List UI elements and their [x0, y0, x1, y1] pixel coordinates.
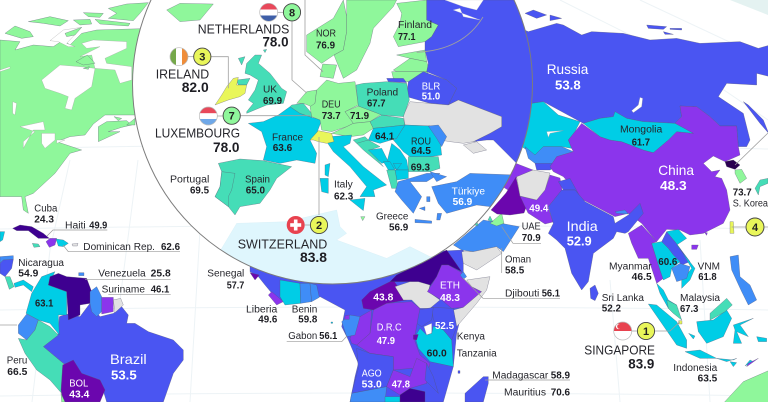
label: Dominican Republic: 62.6: [161, 242, 180, 253]
label: Bolivia: [69, 379, 90, 401]
label: Pakistan value: 49.4: [529, 204, 549, 215]
label: Norway: [316, 29, 336, 51]
label: China: China: [658, 162, 694, 178]
label: UK: UK: [263, 85, 277, 96]
label: Czechia value: 71.9: [350, 111, 369, 122]
label: Bolivia: BOL: [69, 379, 89, 390]
label: Romania: [411, 136, 431, 157]
rank 7: Luxembourg: 7: [229, 111, 235, 123]
label: Germany: DEU: [322, 99, 341, 110]
label: UAE: [522, 221, 541, 244]
label: Liberia: 49.6: [258, 315, 278, 326]
rank 1: Singapore: [584, 322, 655, 371]
label: Nicaragua: [18, 258, 64, 280]
label: Finland: Finland: [398, 20, 432, 31]
map: Europe: [167, 0, 547, 300]
label: Türkiye: 56.9: [453, 197, 473, 208]
label: Angola: AGO: [362, 369, 382, 380]
label: Haiti: [65, 220, 108, 231]
label: Oman: 58.5: [505, 265, 525, 276]
label: Indonesia: [673, 363, 718, 385]
label: Benin: [292, 305, 318, 326]
label: Nicaragua: 54.9: [18, 269, 39, 280]
label: Belarus: 51.0: [422, 91, 441, 102]
label: Sri Lanka: Sri Lanka: [602, 293, 644, 304]
rank 8: Netherlands: [198, 3, 301, 50]
rank 3: Ireland: 3: [199, 52, 205, 64]
label: UAE: UAE: [522, 221, 541, 232]
label: Cuba: [34, 204, 58, 226]
label: Vietnam: [698, 261, 720, 283]
rank 7: Luxembourg: 78.0: [213, 139, 240, 155]
label: Venezuela: Venezuela: [98, 269, 146, 280]
map: Central America and Caribbean: [0, 225, 84, 292]
label: Greece: 56.9: [389, 223, 409, 234]
label: Russia: Russia: [547, 61, 589, 77]
label: Djibouti: Djibouti: [505, 289, 539, 300]
label: Poland: Poland: [367, 88, 398, 99]
label: Bolivia: 43.4: [69, 390, 90, 401]
map: North America: [0, 3, 153, 213]
label: Poland: [367, 88, 398, 110]
rank 2: Switzerland: 2: [316, 220, 322, 232]
label: Haiti: 49.9: [89, 220, 108, 231]
label: Senegal: Senegal: [207, 269, 244, 280]
label: Madagascar: 58.9: [551, 370, 570, 381]
label: Türkiye: Türkiye: [452, 186, 485, 197]
label: Benin: Benin: [292, 305, 317, 316]
label: Oman: [505, 255, 531, 276]
label: Myanmar: [609, 261, 652, 283]
label: Bulgaria value: 69.3: [411, 163, 430, 174]
label: Gabon: Gabon: [288, 331, 317, 342]
label: Russia: 53.8: [555, 77, 581, 92]
rank 7: Luxembourg: LUXEMBOURG: [155, 126, 240, 140]
label: Finland: 77.1: [398, 32, 416, 43]
underlines for labels: [47, 227, 570, 380]
label: Spain: Spain: [245, 174, 270, 185]
label: Peru: [7, 355, 28, 378]
flag: Switzerland: [287, 216, 305, 234]
label: Poland: 67.7: [367, 99, 386, 110]
map: South America: [18, 272, 183, 402]
label: Indonesia: Indonesia: [673, 363, 718, 374]
map: Russia and Central Asia: [500, 10, 768, 242]
label: Angola: 53.0: [362, 379, 382, 390]
label: France: France: [272, 133, 303, 144]
map: Mongolia: [583, 112, 693, 153]
label: Peru: Peru: [7, 355, 27, 366]
label: Venezuela: [98, 269, 171, 280]
label: Belarus: [422, 81, 441, 102]
label: Peru: 66.5: [7, 367, 28, 378]
label: Germany: 73.7: [322, 111, 341, 122]
label: Liberia: [246, 305, 278, 326]
label: UK: [263, 85, 282, 107]
label: Germany: [322, 99, 341, 122]
label: France: 63.6: [273, 143, 293, 154]
label: Brazil: [110, 351, 147, 382]
map: South and Southeast Asia: [548, 190, 768, 402]
label: Spain: 65.0: [246, 185, 265, 196]
label: Venezuela: 25.8: [151, 269, 171, 280]
label: Myanmar: 46.5: [632, 272, 652, 283]
label: Greece: [376, 211, 409, 234]
label: Central African Republic value: 43.8: [373, 293, 394, 304]
flag: Netherlands: [260, 3, 277, 21]
label: Vietnam: 61.8: [698, 272, 717, 283]
label: Hungary value: 64.1: [375, 131, 395, 142]
label: Suriname: Suriname: [102, 284, 145, 295]
label: Mauritius: Mauritius: [504, 388, 546, 399]
flag: Ireland: [170, 48, 188, 65]
label: Oman: Oman: [505, 255, 531, 266]
label: Malaysia: Malaysia: [680, 293, 720, 304]
label: Mongolia: [620, 125, 663, 149]
label: Sri Lanka: 52.2: [602, 304, 621, 315]
label: Tanzania: Tanzania: [457, 349, 497, 360]
label: Gabon: [288, 331, 338, 342]
label: Brazil: 53.5: [111, 367, 137, 382]
label: Ethiopia: 48.3: [440, 293, 460, 304]
label: Italy: 62.3: [334, 191, 354, 202]
label: Sri Lanka: [602, 293, 644, 315]
rank 3: Ireland: 82.0: [182, 79, 209, 95]
map: East Asia: [705, 160, 768, 235]
rank 2: Switzerland: 83.8: [300, 249, 327, 265]
label: Norway: 76.9: [316, 40, 335, 51]
label: Djibouti: [505, 289, 560, 300]
label: Türkiye: [452, 186, 485, 208]
label: Belarus: BLR: [422, 81, 440, 92]
label: Mongolia: 61.7: [632, 138, 650, 149]
label: Senegal: [207, 269, 245, 291]
rank 2: Switzerland: SWITZERLAND: [238, 238, 327, 252]
rank 8: Netherlands: 8: [289, 7, 295, 19]
label: Benin: 59.8: [298, 315, 318, 326]
label: D.R.C.: 47.9: [377, 336, 395, 347]
label: Mongolia: Mongolia: [620, 125, 663, 136]
label: Italy: [334, 179, 354, 202]
label: Cuba: 24.3: [34, 215, 54, 226]
label: Myanmar: Myanmar: [609, 261, 652, 272]
label: Angola: [362, 369, 382, 390]
label: Gabon: 56.1: [319, 331, 338, 342]
label: Portugal: Portugal: [170, 174, 209, 185]
label: India: India: [567, 218, 598, 234]
label: Liberia: Liberia: [246, 305, 278, 316]
label: Cuba: Cuba: [34, 204, 58, 215]
label: Romania: 64.5: [411, 146, 431, 157]
label: Greece: Greece: [376, 211, 409, 222]
label: Madagascar: Madagascar: [492, 370, 549, 381]
label: India: [567, 218, 598, 249]
label: Vietnam: VNM: [698, 261, 720, 272]
label: Finland: [398, 20, 432, 43]
label: Nicaragua: Nicaragua: [18, 258, 64, 269]
label: Ethiopia: [440, 280, 460, 304]
label: Suriname: [102, 284, 170, 295]
flag: Luxembourg: [200, 107, 216, 125]
rank 3: Ireland: IRELAND: [156, 68, 209, 82]
label: Zambia value: 47.8: [392, 379, 410, 390]
rank 7: Luxembourg: [155, 107, 240, 155]
label: Portugal: 69.5: [190, 185, 209, 196]
rank 8: Netherlands: 78.0: [262, 34, 289, 50]
rank 8: Netherlands: NETHERLANDS: [198, 22, 289, 36]
rank 4 badge: [746, 218, 764, 236]
label: Djibouti: 56.1: [542, 289, 560, 300]
label: France: [272, 133, 303, 154]
magnifier: Europe inset: [132, 0, 547, 300]
label: Portugal: [170, 174, 209, 196]
label: Dominican Republic: Dominican Rep.: [83, 242, 155, 253]
label: Tanzania value: 60.0: [427, 349, 447, 360]
label: Indonesia: 63.5: [698, 374, 718, 385]
flag: Singapore: [614, 322, 632, 334]
label: Italy: Italy: [334, 179, 353, 190]
label: UK: 69.9: [263, 96, 282, 107]
label: South Korea: 73.7: [733, 188, 752, 199]
rank 4 badge: 4: [752, 222, 759, 234]
label: Brazil: Brazil: [110, 351, 147, 367]
label: China: 48.3: [660, 178, 687, 193]
label: Kenya value: 52.5: [435, 321, 454, 332]
rank 2: Switzerland: [238, 216, 328, 265]
label: India: 52.9: [567, 234, 592, 249]
label: China: [658, 162, 694, 193]
label: Ethiopia: ETH: [440, 280, 460, 291]
label: Spain: [245, 174, 270, 196]
label: Norway: NOR: [316, 29, 336, 40]
map: Africa and Arabia: [250, 213, 519, 402]
label: Colombia value: 63.1: [35, 299, 54, 310]
label: Malaysia: [680, 293, 720, 315]
label: South Korea: [733, 188, 768, 210]
map: Iran, Afghanistan and Pakistan: [472, 163, 562, 226]
label: Russia: [547, 61, 589, 92]
label: Suriname: 46.1: [151, 284, 170, 295]
label: D.R.C.: [377, 323, 402, 347]
rank 3: Ireland: [156, 47, 211, 95]
label: Malaysia: 67.3: [680, 304, 699, 315]
rank 1: Singapore: SINGAPORE: [584, 343, 655, 357]
label: Romania: ROU: [411, 136, 431, 147]
label: Thailand value: 60.6: [658, 257, 678, 268]
label: D.R.C.: D.R.C: [377, 323, 402, 334]
label: Haiti: Haiti: [65, 220, 86, 231]
label: Senegal: 57.7: [227, 280, 245, 291]
rank 1: Singapore: 83.9: [628, 355, 655, 371]
label: Mauritius: 70.6: [551, 388, 570, 399]
label: Kenya: Kenya: [457, 331, 485, 342]
label: UAE: 70.9: [522, 233, 541, 244]
label: Mauritius: [504, 388, 570, 399]
rank 1: Singapore: 1: [643, 326, 649, 338]
